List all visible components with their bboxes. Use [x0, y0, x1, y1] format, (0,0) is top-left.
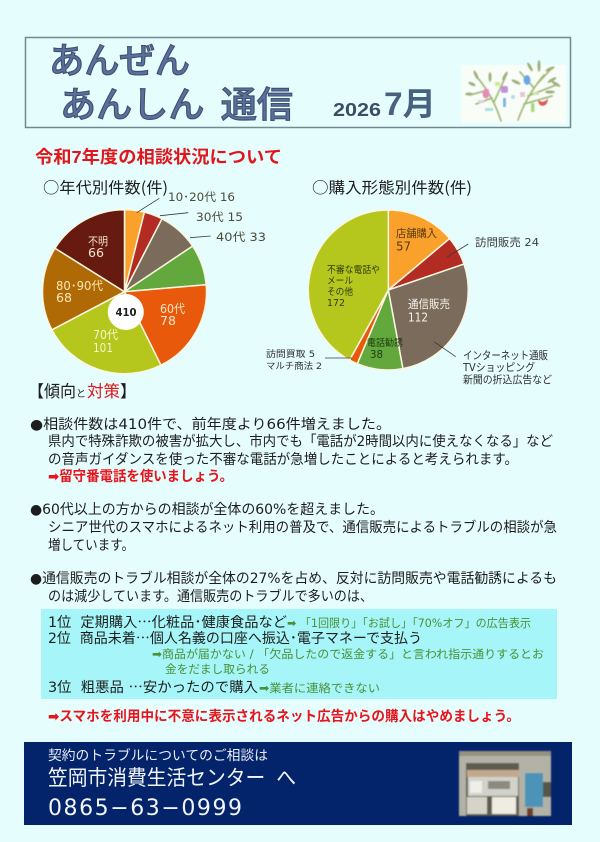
panel: age pie chart [43, 176, 266, 374]
text block: trend 2: 増しています。 [48, 538, 134, 554]
purchase type labels: 172 [327, 298, 345, 309]
purchase type labels: 不審な電話や [327, 264, 380, 276]
centre name: 笠岡市消費生活センター へ [48, 767, 296, 790]
leader lines: age [137, 198, 211, 238]
text block: trend 1: ●相談件数は410件で、前年度より66件増えました。 [30, 416, 391, 433]
pie slices: age [43, 210, 206, 374]
title: あんしん 通信: あんしん 通信 [60, 76, 293, 128]
issue date: 2026 [333, 100, 381, 120]
icon: tanabata bamboo [461, 60, 566, 123]
purchase type labels: 57 [396, 238, 411, 254]
rank 2: 金をだまし取られる [165, 662, 270, 676]
header panel [26, 32, 570, 128]
age labels: 80･90代 [56, 279, 103, 293]
panel: top 3 trouble ranking [41, 609, 557, 699]
purchase type labels: 通信販売 [408, 297, 450, 311]
issue date [333, 86, 436, 122]
age labels: 78 [160, 314, 176, 328]
purchase type labels: 38 [370, 348, 383, 361]
age labels: 40代 33 [216, 230, 266, 244]
age labels: 10･20代 16 [168, 190, 235, 204]
purchase type labels: 訪問買取 5 [266, 348, 315, 360]
rank 3: 3位 粗悪品 …安かったので購入 [48, 677, 258, 697]
text block: trend 1: の音声ガイダンスを使った不審な電話が急増したことによると考えられます。 [48, 451, 518, 468]
callout: use answering machine: ➡留守番電話を使いましょう。 [48, 468, 233, 485]
purchase type labels: メール [327, 276, 353, 287]
text block: trend 1 [30, 416, 553, 485]
purchase type labels: マルチ商法 2 [266, 360, 322, 372]
age labels [56, 190, 266, 355]
text block: trend 2 [30, 502, 557, 554]
age labels: 30代 15 [196, 210, 243, 224]
age labels: 不明 [88, 235, 108, 248]
chart heading: purchase type: ○購入形態別件数(件) [312, 176, 472, 198]
heading: trends and countermeasures: と [76, 388, 86, 400]
heading: trends and countermeasures: 】 [120, 382, 136, 401]
callout: stop buying from ads: ➡スマホを利用中に不意に表示されるネット広告からの購入はやめましょう。 [48, 708, 520, 725]
rank 1: ➡ 「1回限り」「お試し」「70%オフ」の広告表示 [287, 616, 531, 630]
title: あんぜん: あんぜん [49, 32, 190, 84]
rank 3 [48, 677, 380, 697]
purchase type labels: 訪問販売 24 [475, 236, 539, 249]
leader lines: purchase type [325, 244, 468, 358]
age labels: 101 [93, 341, 113, 355]
rank 1: 1位 定期購入…化粧品･健康食品など [48, 612, 287, 632]
purchase type labels: 店舗購入 [396, 226, 437, 240]
rank 2: ➡商品が届かない / 「欠品したので返金する」と言われ指示通りするとお [152, 647, 544, 661]
rank 2 [48, 628, 544, 676]
text block: trend 2: シニア世代のスマホによるネット利用の普及で、通信販売によるトラブルの相談が急 [48, 519, 557, 536]
age labels: 60代 [160, 302, 185, 316]
heading: consultation status: 令和7年度の相談状況について [35, 147, 282, 167]
total in centre: 410 [116, 307, 136, 319]
text block: trend 3: のは減少しています。通信販売のトラブルで多いのは、 [48, 588, 373, 605]
contact lead text: 契約のトラブルについてのご相談は [48, 747, 268, 763]
text block: trend 1: 県内で特殊詐欺の被害が拡大し、市内でも「電話が2時間以内に使えなくなる」など [48, 433, 553, 450]
rank 1 [48, 612, 531, 632]
pie slices: purchase type [308, 210, 468, 370]
rank 2: 2位 商品未着…個人名義の口座へ振込･電子マネーで支払う [48, 628, 422, 648]
text block: trend 3: ●通信販売のトラブル相談が全体の27%を占め、反対に訪問販売や電話勧誘によるも [30, 570, 557, 587]
text block: trend 3 [30, 570, 557, 605]
panel: purchase type pie chart [266, 176, 552, 386]
rank 3: ➡業者に連絡できない [259, 681, 380, 695]
purchase type labels: インターネット通販 [463, 349, 548, 362]
photo: consumer centre entrance [459, 751, 551, 816]
purchase type labels: その他 [327, 286, 353, 298]
phone number: 0865−63−0999 [48, 796, 242, 821]
age labels: 66 [88, 246, 104, 260]
chart heading: age: ○年代別件数(件) [43, 176, 168, 198]
purchase type labels: 新聞の折込広告など [463, 373, 552, 386]
purchase type labels: TVショッピング [462, 360, 535, 374]
heading: trends and countermeasures: 対策 [87, 382, 120, 401]
purchase type labels [266, 226, 552, 386]
purchase type labels: 112 [408, 310, 428, 324]
contact banner [24, 742, 572, 825]
heading: trends and countermeasures: 【傾向 [28, 382, 76, 401]
issue date: 7月 [384, 86, 436, 122]
heading: trends and countermeasures [28, 382, 136, 401]
age labels: 70代 [93, 328, 118, 342]
text block: trend 2: ●60代以上の方からの相談が全体の60%を超えました。 [30, 502, 384, 518]
purchase type labels: 電話勧誘 [367, 337, 403, 349]
total in centre [108, 294, 144, 330]
age labels: 68 [56, 291, 72, 305]
